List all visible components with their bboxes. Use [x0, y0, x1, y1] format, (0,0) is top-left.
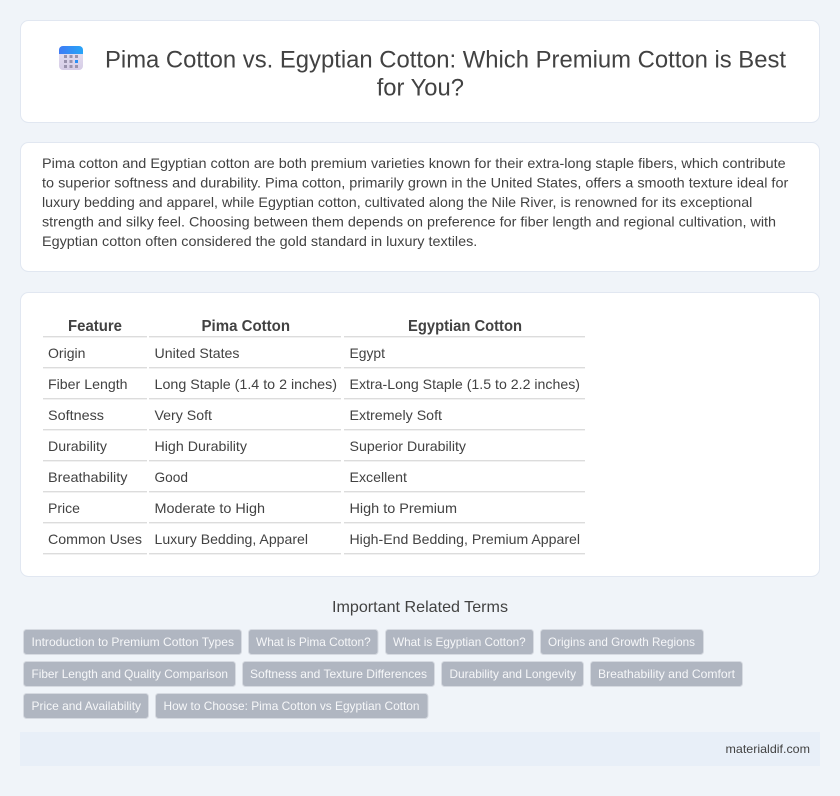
tags: related terms: Softness and Texture Differences: [250, 667, 427, 681]
table: pima cotton column: High Durability: [154, 438, 247, 454]
table: pima cotton column: Good: [154, 469, 188, 485]
table: feature column: Breathability: [48, 469, 128, 485]
table: feature column: Price: [48, 500, 80, 516]
text block: introduction paragraph: [42, 155, 789, 249]
text block: introduction paragraph: to superior softness and durability. Pima cotton, primarily grown in the United States, offers a smooth texture ideal for: [42, 174, 789, 190]
table: egyptian cotton column: Superior Durability: [350, 438, 466, 454]
text block: introduction paragraph: luxury bedding and apparel, while Egyptian cotton, cultivated along the Nile River, is renowned for its exceptional: [42, 194, 752, 210]
tags: related terms: Fiber Length and Quality Comparison: [32, 667, 228, 681]
table: header row: Pima Cotton: [202, 318, 290, 335]
table: egyptian cotton column: Extremely Soft: [350, 407, 442, 423]
table: header row: Feature: [68, 318, 122, 335]
table: egyptian cotton column: Extra-Long Staple (1.5 to 2.2 inches): [350, 376, 580, 392]
table: header row: Egyptian Cotton: [408, 318, 522, 335]
heading: important related terms: Important Related Terms: [332, 599, 508, 616]
tags: related terms: Origins and Growth Regions: [548, 635, 695, 649]
table: egyptian cotton column: High-End Bedding, Premium Apparel: [350, 531, 580, 547]
panel: title header: [20, 20, 820, 122]
table: feature column: Softness: [48, 407, 104, 423]
table: feature column: Common Uses: [48, 531, 142, 547]
table: pima cotton column: [154, 345, 337, 547]
tags: related terms: Durability and Longevity: [450, 667, 576, 681]
footer: [20, 732, 820, 766]
table: pima cotton column: United States: [154, 345, 240, 361]
table: feature column: [48, 345, 142, 547]
tags: related terms: [24, 630, 742, 718]
table: egyptian cotton column: High to Premium: [350, 500, 457, 516]
text block: introduction paragraph: Pima cotton and Egyptian cotton are both premium varieties known for their extra-long staple fibers, which contribute: [42, 155, 786, 171]
panel: comparison table: [20, 292, 820, 576]
table: egyptian cotton column: [350, 345, 580, 547]
table: pima cotton column: Luxury Bedding, Apparel: [154, 531, 308, 547]
tags: related terms: Introduction to Premium Cotton Types: [32, 635, 234, 649]
title: Pima Cotton vs. Egyptian Cotton: Which Premium Cotton is Best: [105, 46, 786, 74]
table: pima cotton column: Long Staple (1.4 to 2 inches): [154, 376, 337, 392]
title: [105, 46, 786, 102]
table: egyptian cotton column: Egypt: [350, 345, 385, 361]
table: feature column: Fiber Length: [48, 376, 128, 392]
table: pima cotton column: Very Soft: [154, 407, 212, 423]
table: header row: [68, 318, 522, 335]
tags: related terms: Breathability and Comfort: [598, 667, 736, 681]
text block: introduction paragraph: Egyptian cotton often considered the gold standard in luxury textiles.: [42, 233, 477, 249]
tags: related terms: How to Choose: Pima Cotton vs Egyptian Cotton: [164, 699, 420, 713]
title: for You?: [377, 74, 464, 102]
table: egyptian cotton column: Excellent: [350, 469, 407, 485]
table: pima cotton column: Moderate to High: [154, 500, 265, 516]
text block: introduction paragraph: strength and silky feel. Choosing between them depends on preference for fiber length and regional cultivation, with: [42, 214, 776, 230]
table: feature column: Durability: [48, 438, 107, 454]
panel: introduction: [20, 142, 820, 272]
tags: related terms: What is Pima Cotton?: [256, 635, 371, 649]
tags: related terms: What is Egyptian Cotton?: [393, 635, 526, 649]
icon: calendar: [59, 46, 83, 70]
table: feature column: Origin: [48, 345, 86, 361]
footer: materialdif.com: [726, 742, 810, 756]
tags: related terms: Price and Availability: [32, 699, 141, 713]
